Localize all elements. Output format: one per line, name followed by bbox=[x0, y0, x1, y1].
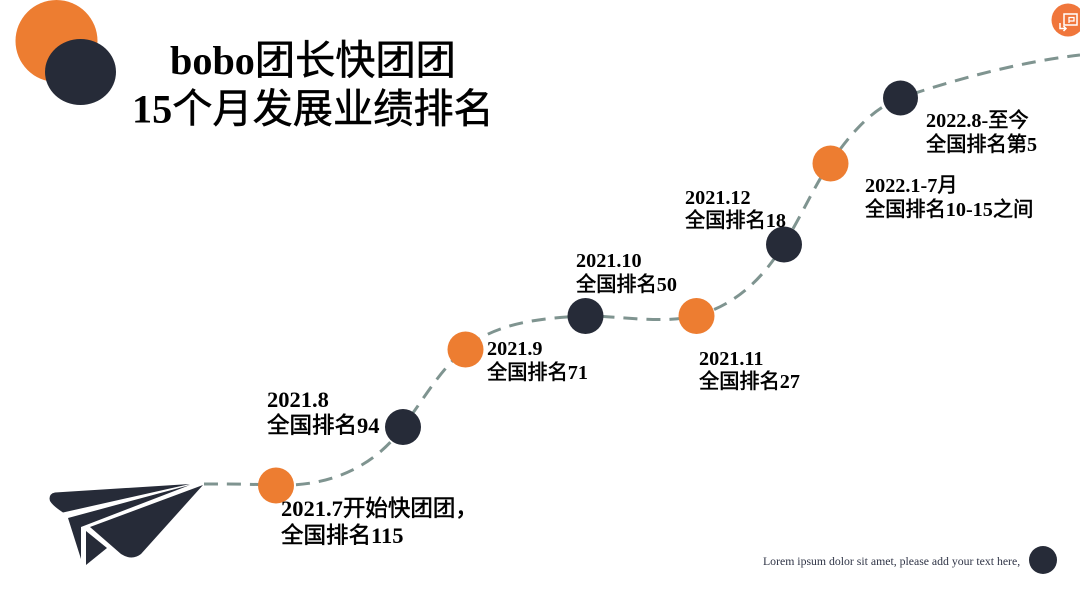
milestone: 2021.9: 2021.9 bbox=[487, 338, 543, 360]
milestone: 2021.11: 全国排名27 bbox=[699, 365, 800, 394]
title bbox=[132, 27, 494, 134]
milestone: 2021.8: 2021.8 bbox=[267, 387, 329, 412]
title: 15个月发展业绩排名 bbox=[132, 76, 494, 134]
milestone: 2021.10: 全国排名50 bbox=[576, 268, 677, 297]
icon: orange share badge bbox=[1052, 4, 1080, 36]
icon: paper plane bbox=[50, 484, 203, 565]
milestone: 2021.9: 全国排名71 bbox=[487, 356, 588, 385]
dashed growth path bbox=[204, 55, 1080, 485]
milestone: 2021.9 bbox=[448, 332, 588, 385]
milestone: 2021.7: 2021.7开始快团团， bbox=[281, 491, 478, 523]
milestone: 2021.8 bbox=[267, 387, 421, 445]
milestone: 2021.11 bbox=[678, 298, 800, 394]
milestone: 2022.8 to present bbox=[883, 80, 1037, 157]
milestone: 2022.1-7月: 2022.1-7月 bbox=[865, 169, 958, 198]
milestone: 2021.7 bbox=[258, 468, 478, 550]
milestone: 2021.8: 全国排名94 bbox=[267, 408, 380, 440]
milestone: 2022.8 to present: 2022.8-至今 bbox=[926, 104, 1029, 133]
decorative overlapping circles bbox=[16, 0, 116, 105]
milestone: 2022.1-7月: 全国排名10-15之间 bbox=[865, 193, 1033, 222]
footer note: Lorem ipsum dolor sit amet, please add your text here, bbox=[763, 555, 1020, 568]
milestone: 2021.7: 全国排名115 bbox=[281, 518, 404, 550]
footer dot bbox=[1029, 546, 1057, 574]
milestone: 2022.8 to present: 全国排名第5 bbox=[926, 128, 1037, 157]
milestone: 2021.12: 2021.12 bbox=[685, 187, 751, 209]
milestone: 2021.10 bbox=[568, 250, 677, 334]
title: bobo团长快团团 bbox=[170, 27, 456, 86]
milestone: 2022.1-7月 bbox=[812, 146, 1033, 222]
milestone: 2021.12: 全国排名18 bbox=[685, 204, 786, 233]
milestone: 2021.10: 2021.10 bbox=[576, 250, 642, 272]
milestone: 2021.11: 2021.11 bbox=[699, 348, 764, 370]
milestone: 2021.12 bbox=[685, 187, 802, 262]
